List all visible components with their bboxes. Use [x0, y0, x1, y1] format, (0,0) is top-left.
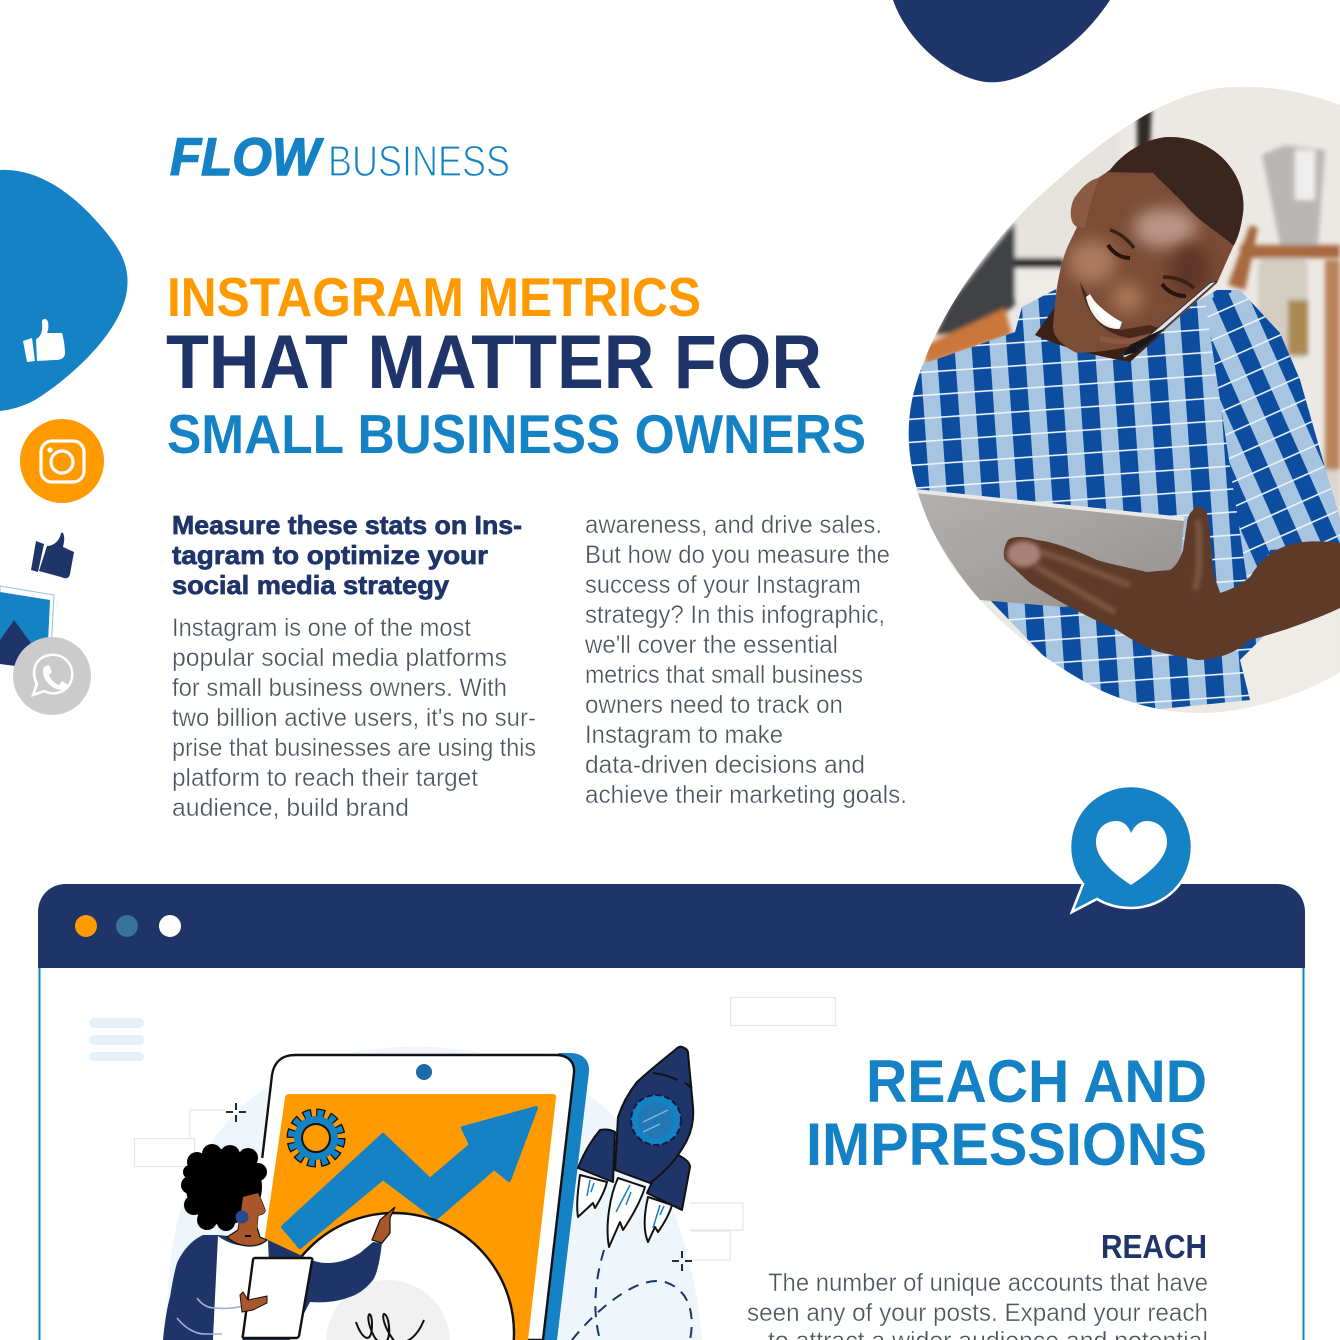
logo: BUSINESS [328, 137, 510, 186]
intro paragraph start: audience, build brand [172, 794, 409, 822]
window dots [75, 915, 181, 937]
neck and face [227, 1193, 267, 1246]
intro right column: awareness, and drive sales. [585, 511, 882, 539]
pale background blob [167, 1046, 702, 1340]
intro paragraph start: prise that businesses are using this [172, 734, 536, 762]
ear [1071, 177, 1100, 228]
icon: hamburger menu [89, 1018, 144, 1061]
icon: heart speech bubble [1070, 786, 1192, 912]
title [166, 266, 866, 465]
torso [163, 1235, 382, 1340]
rocket [577, 1047, 693, 1247]
face over hair [238, 1193, 265, 1232]
head [1053, 137, 1244, 353]
device [240, 1053, 589, 1340]
reach subheading: REACH [1101, 1228, 1207, 1265]
intro paragraph start [172, 614, 536, 822]
logo [170, 128, 510, 187]
rocket window [631, 1095, 681, 1145]
reach description: seen any of your posts. Expand your reach [747, 1299, 1208, 1327]
body [615, 1047, 693, 1183]
mouth with teeth [1080, 282, 1165, 338]
social icons column [0, 170, 128, 715]
intro left column [172, 510, 536, 822]
brows, eyes [1110, 230, 1194, 288]
intro subheading: Measure these stats on Ins- [172, 510, 522, 540]
pointing hand [372, 1207, 395, 1243]
section heading: reach and impressions: REACH AND [866, 1048, 1207, 1115]
afro hair [181, 1144, 267, 1231]
icon: navy thumb [31, 533, 74, 578]
intro right column: strategy? In this infographic, [585, 601, 885, 629]
section heading: reach and impressions: IMPRESSIONS [806, 1111, 1207, 1178]
intro paragraph start: Instagram is one of the most [172, 614, 471, 642]
icon: picture card [0, 586, 54, 668]
logo: FLOW [170, 128, 324, 187]
gray circle with squiggle [326, 1280, 450, 1340]
section heading: reach and impressions [806, 1048, 1207, 1178]
intro right column: Instagram to make [585, 721, 783, 749]
reach description [747, 1269, 1208, 1340]
growth arrow [283, 1108, 536, 1247]
intro subheading: social media strategy [172, 570, 450, 600]
reach description: The number of unique accounts that have [768, 1269, 1208, 1297]
intro right column [584, 511, 907, 809]
icon: instagram [20, 419, 104, 503]
intro paragraph start: two billion active users, it's no sur- [172, 704, 536, 732]
intro paragraph start: platform to reach their target [172, 764, 478, 792]
neck [1035, 307, 1160, 362]
flames [577, 1175, 607, 1217]
browser window panel [38, 884, 1305, 1340]
window header bar [38, 884, 1305, 968]
intro subheading: tagram to optimize your [172, 540, 488, 570]
hand on clipboard [240, 1292, 267, 1312]
icon: gear [291, 1113, 341, 1163]
icon: whatsapp [13, 637, 91, 715]
sparkles [226, 1103, 692, 1271]
person [163, 1144, 395, 1340]
intro paragraph start: popular social media platforms [172, 644, 507, 672]
window body [40, 960, 1304, 1340]
intro right column: we'll cover the essential [584, 631, 838, 659]
illustration: growth on tablet with person and rocket [163, 1046, 702, 1340]
dashed trajectory [572, 1250, 692, 1340]
fins [578, 1129, 615, 1182]
clipboard [243, 1258, 312, 1338]
title: INSTAGRAM METRICS [167, 266, 701, 328]
tablet [915, 492, 1184, 607]
intro right column: data-driven decisions and [585, 751, 865, 779]
intro right column: But how do you measure the [585, 541, 890, 569]
white circle [274, 1213, 514, 1340]
phone [1122, 281, 1217, 358]
intro right column: metrics that small business [585, 661, 863, 689]
intro right column: owners need to track on [585, 691, 843, 719]
shirt [905, 287, 1340, 715]
hand and arm [1004, 507, 1340, 660]
intro right column: achieve their marketing goals. [585, 781, 907, 809]
hair [1107, 137, 1244, 245]
intro subheading [172, 510, 522, 600]
title: THAT MATTER FOR [166, 320, 822, 405]
intro paragraph start: for small business owners. With [172, 674, 507, 702]
photo: smiling man with tablet and phone [900, 80, 1340, 720]
decorative navy blob [893, 0, 1110, 82]
title: SMALL BUSINESS OWNERS [167, 403, 866, 465]
ghost placeholders [134, 998, 836, 1260]
intro right column: success of your Instagram [585, 571, 861, 599]
blue blob with thumb icon [0, 170, 128, 411]
